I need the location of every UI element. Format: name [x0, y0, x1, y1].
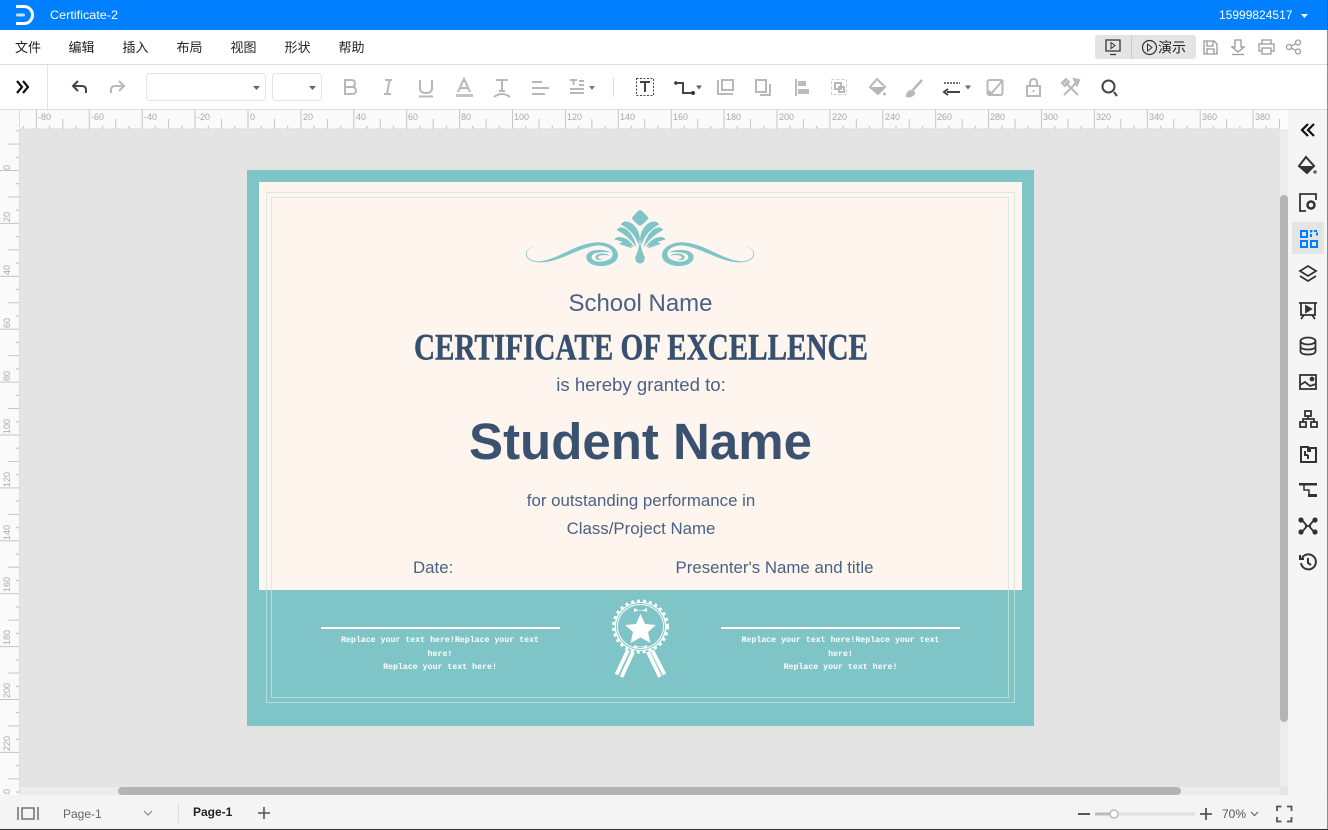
ruler labels: -40	[144, 112, 157, 122]
menu items: 视图	[230, 40, 257, 55]
ruler labels: 20	[303, 112, 313, 122]
presenter label: Presenter's Name and title	[676, 558, 873, 577]
ruler labels: 40	[2, 265, 12, 275]
icon: page chevron	[144, 811, 152, 815]
icon: save	[1204, 41, 1217, 54]
icon: account caret	[1301, 14, 1308, 18]
menu items: 编辑	[68, 40, 95, 55]
ruler labels: 220	[2, 736, 12, 751]
icon: undo	[73, 81, 86, 93]
toolbar	[0, 65, 1328, 110]
ruler labels: 380	[1255, 112, 1270, 122]
icon: fullscreen	[1277, 806, 1292, 822]
icon: edit shape	[986, 80, 1003, 96]
icon: database	[1300, 338, 1316, 354]
user account: 15999824517	[1219, 8, 1293, 22]
ornament	[526, 210, 754, 266]
icon: group	[832, 80, 846, 94]
right signature block: here!	[828, 649, 853, 659]
ruler labels: 240	[885, 112, 900, 122]
icon: underline	[419, 80, 433, 96]
icon: page panel	[18, 807, 38, 820]
title bar	[0, 0, 1328, 30]
ruler labels: 160	[673, 112, 688, 122]
menu items: 形状	[284, 40, 311, 55]
right signature block: Replace your text here!	[784, 662, 897, 672]
icon: line style	[944, 83, 971, 95]
double border lines	[266, 192, 1014, 702]
icon: zoom out	[1078, 813, 1090, 815]
menu items: 文件	[15, 40, 41, 55]
icon: italic	[384, 80, 392, 94]
vertical scrollbar	[1280, 110, 1288, 787]
ruler labels: 180	[726, 112, 741, 122]
icon: fill	[870, 79, 886, 96]
icon: tools	[1062, 79, 1079, 95]
right signature block: Replace your text here!Replace your text	[741, 635, 940, 645]
ruler labels: 0	[2, 165, 12, 170]
icon: text align	[532, 82, 549, 94]
left signature block: Replace your text here!	[383, 662, 497, 672]
document name: Certificate-2	[50, 8, 118, 22]
icon: org chart	[1300, 411, 1317, 427]
icon: share	[1286, 40, 1300, 54]
ruler labels: 320	[1096, 112, 1111, 122]
ruler labels: 340	[1149, 112, 1164, 122]
zoom percent: 70%	[1222, 807, 1246, 821]
icon: presentation	[1299, 303, 1317, 319]
icon: bring front	[718, 80, 733, 94]
icon: text box	[636, 78, 654, 96]
ruler labels: 140	[2, 525, 12, 540]
icon: add page	[258, 807, 270, 819]
font size select	[272, 74, 322, 100]
right side panel	[1288, 110, 1328, 796]
icon: layers	[1300, 266, 1316, 281]
menu items: 布局	[176, 40, 203, 55]
certificate title: CERTIFICATE OF EXCELLENCE	[414, 328, 868, 368]
ruler labels: 80	[2, 371, 12, 381]
icon: line spacing	[570, 80, 595, 93]
ruler labels: 20	[2, 212, 12, 222]
ruler labels: 280	[990, 112, 1005, 122]
menu items: 插入	[122, 40, 149, 55]
left signature block	[321, 627, 560, 672]
icon: floor plan	[1301, 447, 1316, 462]
ruler labels: 160	[2, 577, 12, 592]
icon: collapse left panel	[17, 81, 28, 93]
font family select	[146, 74, 266, 100]
ruler labels	[38, 112, 1270, 122]
menu bar	[0, 30, 1328, 65]
left signature block: here!	[428, 649, 452, 659]
class name: Class/Project Name	[567, 519, 715, 538]
left flourish	[526, 222, 640, 266]
horizontal scrollbar	[20, 787, 1280, 795]
active panel highlight	[1292, 222, 1324, 254]
left ruler	[0, 110, 20, 804]
granted line: is hereby granted to:	[556, 374, 726, 395]
ruler labels: 100	[2, 419, 12, 434]
icon: symbol library	[1301, 231, 1317, 247]
active page tab: Page-1	[193, 805, 233, 819]
icon: gantt	[1299, 483, 1317, 497]
performance line: for outstanding performance in	[527, 491, 755, 510]
ruler labels	[4, 165, 10, 795]
presentation button: 演示	[1158, 40, 1186, 56]
ruler labels: 0	[250, 112, 255, 122]
icon: lock	[1027, 79, 1040, 96]
icon: font color	[456, 79, 473, 97]
ruler labels: 300	[1043, 112, 1058, 122]
teal frame	[247, 170, 1034, 726]
zoom slider	[1095, 810, 1195, 818]
icon: line brush	[907, 80, 922, 96]
ruler labels: 360	[1202, 112, 1217, 122]
ruler labels: 180	[2, 630, 12, 645]
ruler labels: 240	[2, 789, 12, 804]
ruler labels: 140	[620, 112, 635, 122]
menu items: 帮助	[338, 40, 365, 55]
ruler labels: 40	[356, 112, 366, 122]
page selector: Page-1	[63, 807, 102, 821]
icon: page settings	[1300, 194, 1316, 211]
ruler labels: 60	[408, 112, 418, 122]
icon: award ribbon badge	[614, 601, 668, 677]
top ruler	[20, 110, 1280, 130]
ruler labels: -80	[38, 112, 51, 122]
icon: collapse panel	[1302, 124, 1314, 136]
ruler labels: 220	[832, 112, 847, 122]
icon: image	[1300, 375, 1316, 389]
ruler labels: -20	[197, 112, 210, 122]
icon: text style	[494, 80, 510, 97]
school name: School Name	[568, 290, 713, 317]
icon: send back	[756, 80, 770, 95]
icon: bold	[345, 80, 356, 94]
presentation button	[1095, 35, 1196, 59]
student name: Student Name	[469, 413, 812, 470]
ruler labels: -60	[91, 112, 104, 122]
menu items	[15, 40, 365, 55]
icon: zoom chevron	[1251, 812, 1258, 816]
right signature block	[721, 627, 960, 672]
ruler labels: 80	[461, 112, 471, 122]
ruler labels: 260	[937, 112, 952, 122]
icon: print	[1259, 40, 1274, 54]
cream panel	[259, 182, 1022, 590]
icon: redo	[111, 81, 124, 93]
icon: mind map	[1299, 518, 1317, 534]
icon: app logo	[16, 6, 32, 24]
date label: Date:	[413, 558, 453, 577]
icon: download	[1232, 40, 1244, 54]
certificate page	[247, 170, 1034, 726]
ruler labels: 120	[567, 112, 582, 122]
right flourish	[640, 222, 754, 266]
icon: history	[1300, 554, 1316, 569]
ruler labels: 120	[2, 472, 12, 487]
icon: align shapes	[795, 79, 809, 96]
ruler labels: 200	[2, 683, 12, 698]
icon: fill	[1299, 157, 1317, 174]
ruler labels: 200	[779, 112, 794, 122]
icon: connector	[674, 81, 702, 95]
left signature block: Replace your text here!Replace your text	[341, 635, 539, 645]
ruler labels: 60	[2, 318, 12, 328]
icon: search	[1114, 92, 1117, 96]
icon: zoom in	[1200, 808, 1212, 820]
ruler labels: 100	[514, 112, 529, 122]
